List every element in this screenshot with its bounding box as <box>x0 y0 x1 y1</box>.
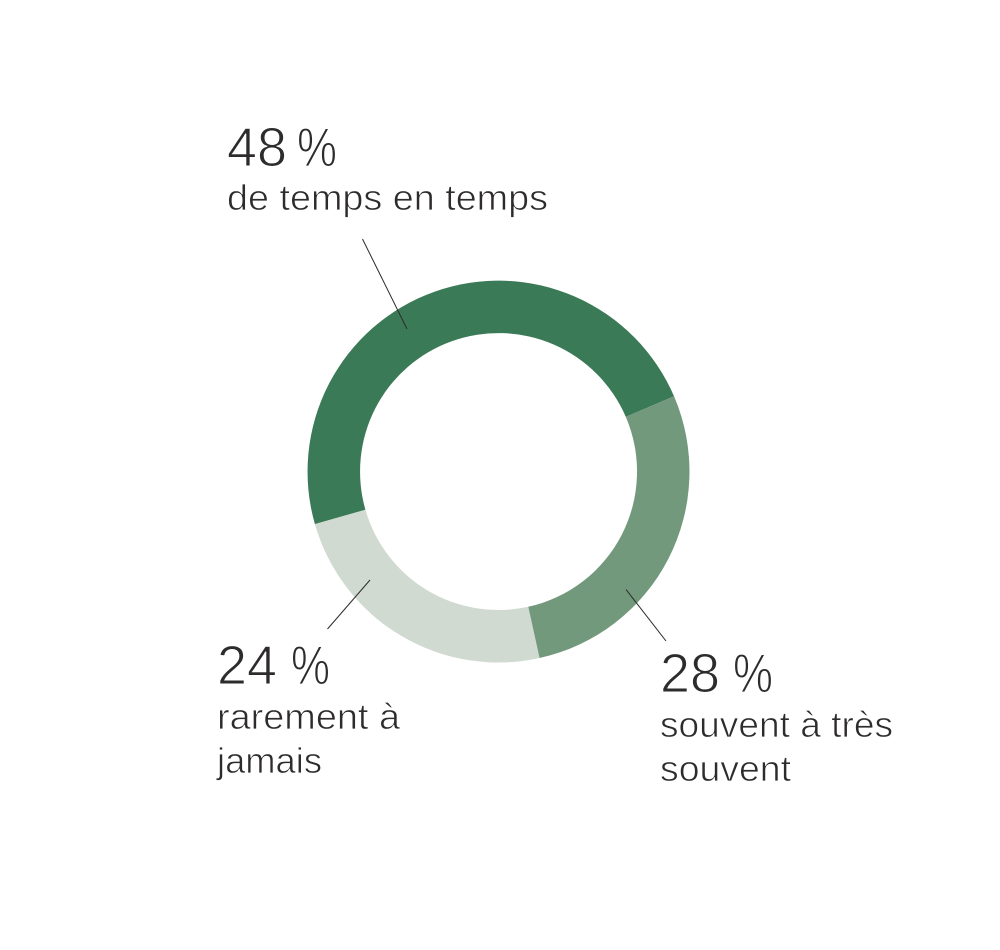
label: 28% souvent à très souvent: souvent à très <box>660 704 893 745</box>
segment: 24% rarement à jamais <box>315 510 540 663</box>
label: 28% souvent à très souvent: souvent <box>660 748 791 789</box>
leader line: 24% <box>328 580 370 629</box>
donut chart <box>308 281 689 663</box>
label: 48% de temps en temps: % <box>297 116 337 178</box>
label: 24% rarement à jamais: rarement à <box>217 696 401 737</box>
label: 24% rarement à jamais <box>216 634 401 781</box>
leader line: 48% <box>362 239 407 329</box>
label: 28% souvent à très souvent: % <box>733 642 773 704</box>
label: 24% rarement à jamais: % <box>291 634 330 696</box>
label: 48% de temps en temps: de temps en temps <box>227 177 548 218</box>
label: 24% rarement à jamais: jamais <box>216 740 322 781</box>
label: 24% rarement à jamais: 24 <box>217 634 277 696</box>
label: 28% souvent à très souvent <box>660 642 893 789</box>
segment: 28% souvent à très souvent <box>528 396 689 658</box>
segment: 48% de temps en temps <box>308 281 674 524</box>
label: 48% de temps en temps: 48 <box>227 116 287 178</box>
label: 28% souvent à très souvent: 28 <box>660 642 720 704</box>
leader line: 28% <box>626 590 666 641</box>
label: 48% de temps en temps <box>227 116 548 218</box>
